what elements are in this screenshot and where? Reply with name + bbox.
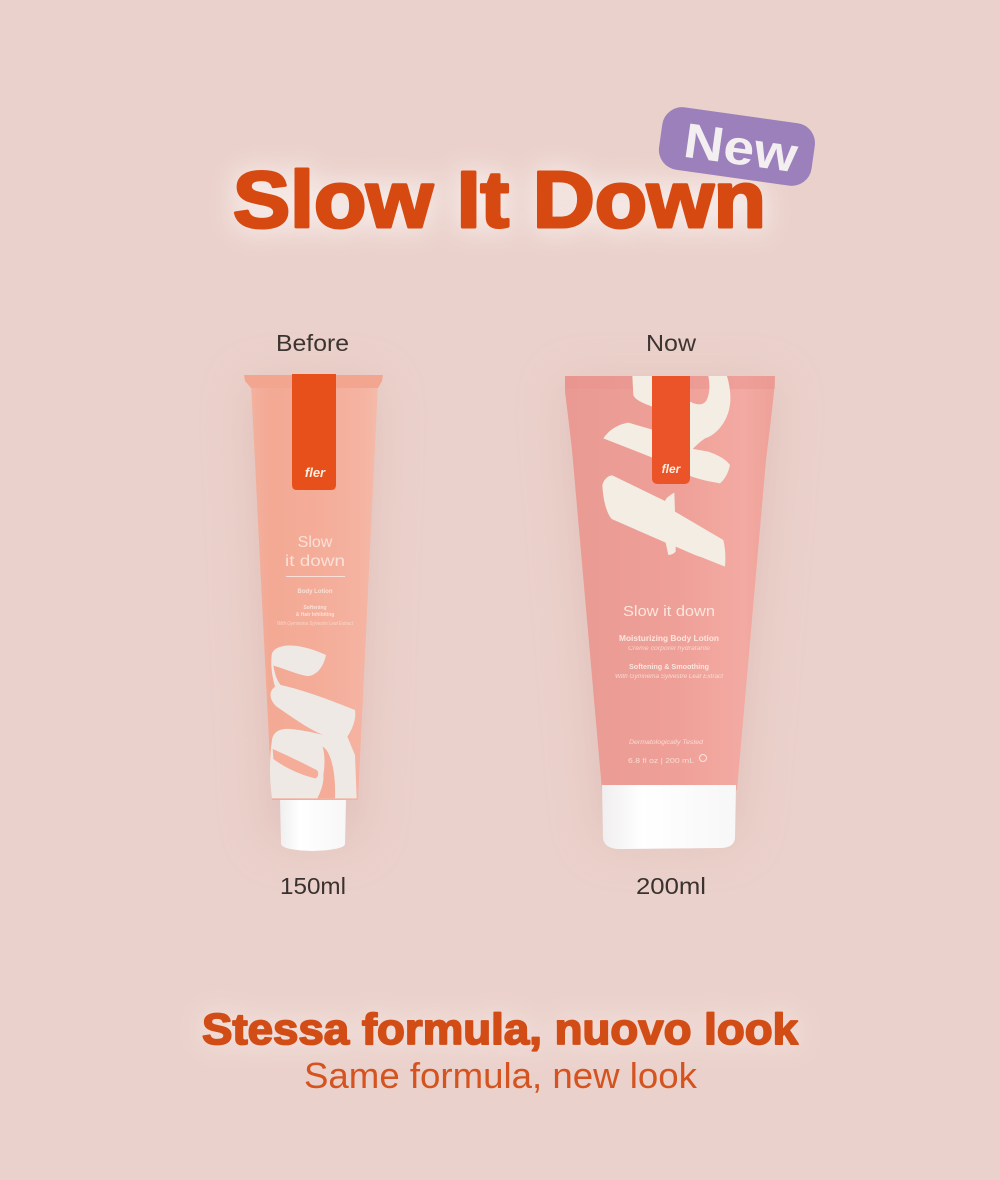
orange band [292, 374, 336, 490]
footer heading: Stessa formula, nuovo look [201, 1005, 800, 1054]
tube crimp [244, 375, 383, 388]
brand: fler [305, 465, 326, 480]
product: old 150ml tube [244, 374, 383, 851]
title: Slow It Down [233, 155, 766, 244]
brand: fler [662, 462, 682, 476]
product text: With Gymnema Sylvestre Leaf Extract [615, 674, 723, 680]
tube body [565, 376, 775, 790]
product text: Slow [298, 534, 333, 551]
label: 150ml: 150ml [280, 873, 346, 899]
product text: Moisturizing Body Lotion [619, 634, 719, 643]
product text: Softening [303, 605, 327, 611]
footer heading: Stessa formula, nuovo look [202, 1005, 799, 1054]
icon: pack symbol [700, 754, 706, 762]
product text [615, 603, 723, 765]
product text [277, 534, 354, 627]
product text: it down [285, 553, 345, 570]
badge: New: New [680, 114, 802, 183]
product text: Body Lotion [298, 589, 333, 595]
label: 200ml: 200ml [636, 873, 706, 899]
product text: With Gymnema Sylvestre Leaf Extract [277, 621, 354, 627]
tube body [251, 383, 378, 800]
tube logo mark [602, 376, 730, 567]
product text: Slow it down [623, 603, 715, 620]
product text: & Hair Inhibiting [296, 612, 334, 618]
label: Before: Before [276, 330, 349, 356]
tube cap [280, 800, 346, 851]
logo inner slit [273, 749, 318, 778]
product text: Crème corporel hydratante [628, 646, 711, 652]
product text: Softening & Smoothing [629, 662, 709, 671]
title: Slow It Down [232, 156, 767, 245]
product text: 6.8 fl oz | 200 mL [628, 758, 694, 765]
tube cap [602, 785, 736, 849]
footer subheading: Same formula, new look [304, 1055, 698, 1096]
badge: New [656, 105, 818, 188]
product: new 200ml tube [565, 376, 775, 849]
tube logo mark [270, 646, 357, 798]
tube crimp [565, 376, 775, 389]
orange band [652, 376, 690, 484]
logo f [602, 475, 725, 567]
product text: Dermatologically Tested [629, 739, 703, 746]
label: Now: Now [646, 330, 696, 356]
